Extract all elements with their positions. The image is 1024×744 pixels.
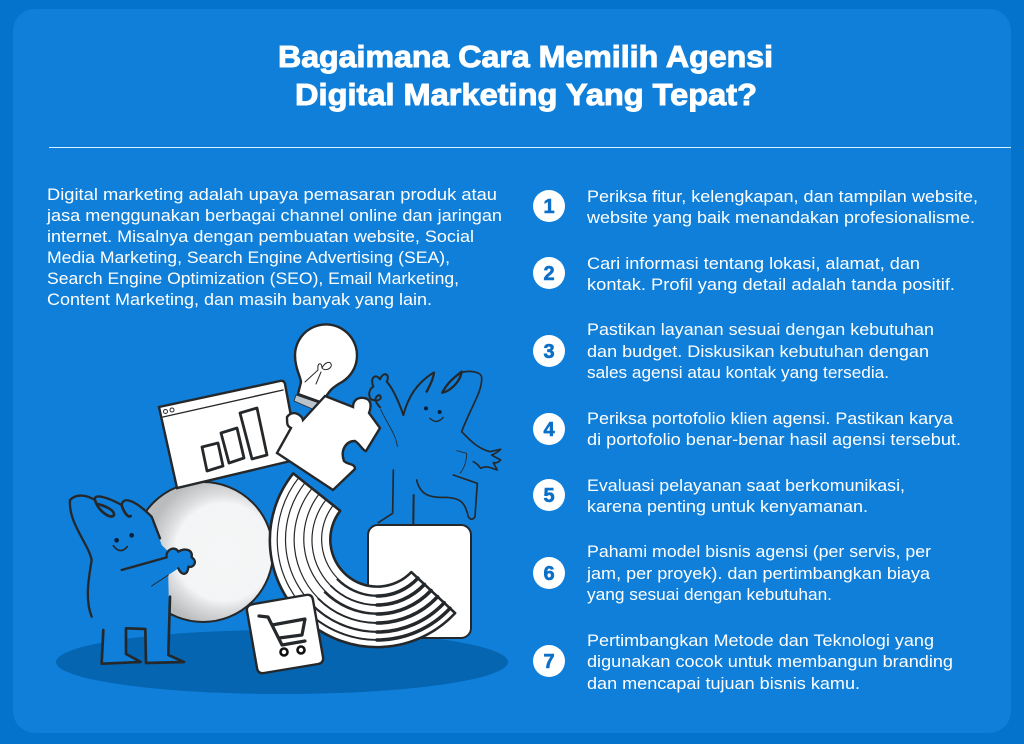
step 7 badge <box>533 645 565 677</box>
step 2 text: Cari informasi tentang lokasi, alamat, dan <box>587 255 920 273</box>
step 2 <box>533 255 955 294</box>
intro paragraph: Media Marketing, Search Engine Advertising (SEA), <box>47 249 450 267</box>
step 5: karena penting untuk kenyamanan. <box>587 498 868 516</box>
sphere <box>133 482 273 622</box>
step 5: 5 <box>543 485 555 507</box>
step 6: jam, per proyek). dan pertimbangkan biaya <box>586 565 931 583</box>
step 4 <box>533 410 961 449</box>
illustration <box>56 324 508 694</box>
striped arc <box>270 473 455 647</box>
step 5 text: Evaluasi pelayanan saat berkomunikasi, <box>587 477 905 495</box>
step 1 <box>533 188 978 227</box>
step 7: 7 <box>543 651 555 673</box>
intro paragraph: jasa menggunakan berbagai channel online dan jaringan <box>46 207 502 225</box>
puzzle piece <box>277 396 380 490</box>
step 5 <box>533 477 905 516</box>
intro paragraph: Search Engine Optimization (SEO), Email Marketing, <box>47 270 459 288</box>
step 6: yang sesuai dengan kebutuhan. <box>587 586 832 604</box>
step 3 text: Pastikan layanan sesuai dengan kebutuhan <box>587 321 934 339</box>
browser window <box>159 381 299 488</box>
step 2 badge <box>533 257 565 289</box>
step 1 badge <box>533 190 565 222</box>
step 7 <box>533 632 953 693</box>
step 3: dan budget. Diskusikan kebutuhan dengan <box>587 343 929 361</box>
light bulb <box>294 324 357 411</box>
step 3 badge <box>533 335 565 367</box>
step 6 <box>533 543 932 604</box>
title: Bagaimana Cara Memilih Agensi <box>278 39 773 74</box>
step 2: 2 <box>543 263 555 285</box>
step 6: 6 <box>543 563 555 585</box>
intro paragraph: Content Marketing, dan masih banyak yang lain. <box>47 291 432 309</box>
step 6 badge <box>533 557 565 589</box>
character: left mascot <box>70 496 195 664</box>
step 5 badge <box>533 479 565 511</box>
step 1: 1 <box>543 196 555 218</box>
step 2: kontak. Profil yang detail adalah tanda positif. <box>587 276 955 294</box>
step 4 text: Periksa portofolio klien agensi. Pastikan karya <box>587 410 954 428</box>
intro paragraph: Digital marketing adalah upaya pemasaran produk atau <box>47 186 497 204</box>
step 7 text: Pertimbangkan Metode dan Teknologi yang <box>587 632 934 650</box>
shopping cart card <box>247 595 323 673</box>
character: right mascot <box>368 371 501 524</box>
step 4: di portofolio benar-benar hasil agensi tersebut. <box>587 431 961 449</box>
white square block <box>368 525 471 638</box>
step 7: dan mencapai tujuan bisnis kamu. <box>587 675 860 693</box>
step 1 text: Periksa fitur, kelengkapan, dan tampilan website, <box>587 188 978 206</box>
intro paragraph: internet. Misalnya dengan pembuatan website, Social <box>47 228 474 246</box>
step 7: digunakan cocok untuk membangun branding <box>587 653 953 671</box>
step 6 text: Pahami model bisnis agensi (per servis, per <box>587 543 932 561</box>
step 3 <box>533 321 934 382</box>
step 3: 3 <box>543 341 555 363</box>
title <box>278 39 773 112</box>
ground shadow <box>56 630 508 694</box>
step 3: sales agensi atau kontak yang tersedia. <box>587 364 889 382</box>
step 4 badge <box>533 413 565 445</box>
intro paragraph <box>46 186 502 309</box>
step 4: 4 <box>543 419 555 441</box>
step 1: website yang baik menandakan profesionalisme. <box>586 209 975 227</box>
title: Digital Marketing Yang Tepat? <box>295 77 757 112</box>
